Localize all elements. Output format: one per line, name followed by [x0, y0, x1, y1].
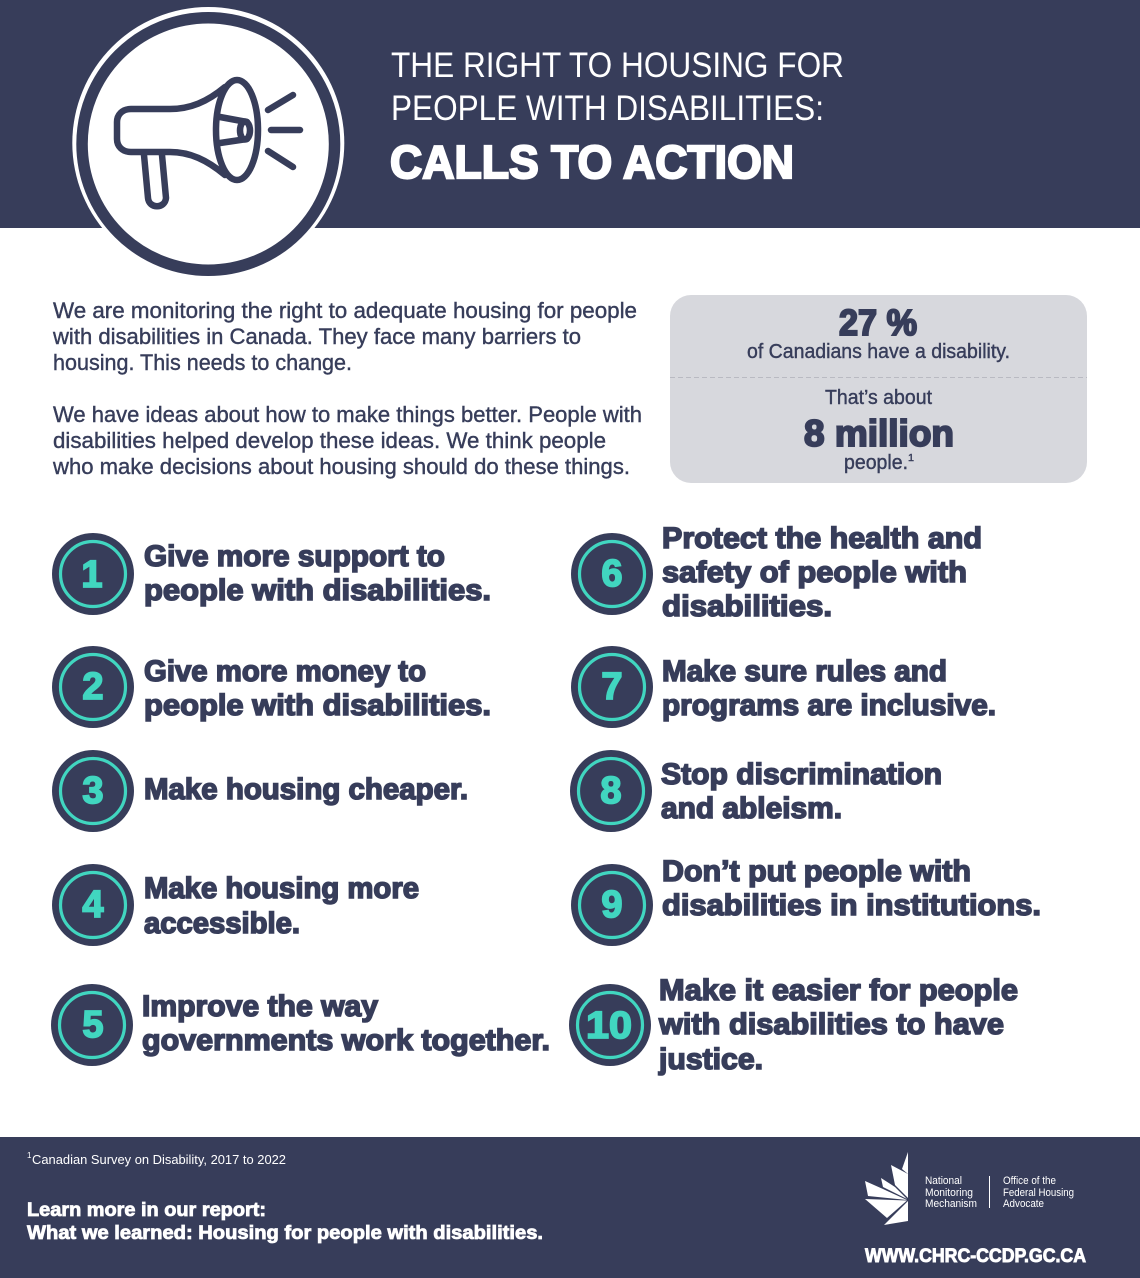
action 8: 8: [600, 770, 622, 812]
report link text: [27, 1200, 543, 1244]
footer band: [0, 1137, 1140, 1278]
action 5: 5: [82, 1004, 104, 1046]
website: WWW.CHRC-CCDP.GC.CA: [865, 1246, 1086, 1267]
intro text: We have ideas about how to make things better. People with: [53, 402, 642, 427]
intro text: We are monitoring the right to adequate housing for people: [53, 298, 637, 323]
footnote: 1: [27, 1151, 32, 1160]
action 1: 1: [81, 554, 103, 596]
stat: 27 percent: of Canadians have a disability.: [747, 341, 1010, 363]
action 1: people with disabilities.: [144, 574, 491, 607]
report link text: Learn more in our report:: [27, 1200, 266, 1221]
action 5: Improve the way: [142, 990, 378, 1023]
action 10: Make it easier for people: [659, 974, 1018, 1007]
action 6: Protect the health and: [662, 522, 982, 555]
action 4: Make housing more: [144, 872, 419, 905]
action 1: [52, 533, 491, 615]
action 6: safety of people with: [662, 556, 967, 589]
action 4: accessible.: [144, 907, 300, 940]
action 2: Give more money to: [144, 655, 426, 688]
action 2: people with disabilities.: [144, 689, 491, 722]
footnote: Canadian Survey on Disability, 2017 to 2022: [32, 1152, 286, 1167]
action 7: Make sure rules and: [662, 655, 947, 688]
action 3: [52, 750, 468, 832]
action 6: disabilities.: [662, 590, 832, 623]
header band: [0, 0, 1140, 228]
icon: megaphone in circle: [72, 7, 344, 279]
logo text: National Monitoring Mechanism: Monitoring: [925, 1187, 973, 1199]
action 10: 10: [586, 1005, 632, 1047]
action 3: Make housing cheaper.: [144, 773, 468, 806]
action 10: with disabilities to have: [658, 1008, 1004, 1041]
title: THE RIGHT TO HOUSING FOR: [391, 46, 844, 85]
action 2: 2: [82, 666, 104, 708]
stat: 27 percent: 27 %: [839, 302, 917, 343]
action 4: 4: [82, 884, 104, 926]
logo text: Office of the Federal Housing Advocate: Federal Housing: [1003, 1187, 1074, 1199]
action 5: [51, 984, 550, 1066]
title: CALLS TO ACTION: [390, 136, 794, 188]
action 8: Stop discrimination: [661, 758, 942, 791]
logo text: Office of the Federal Housing Advocate: Office of the: [1003, 1175, 1056, 1187]
action 9: Don’t put people with: [662, 855, 971, 888]
intro text: disabilities helped develop these ideas. We think people: [53, 428, 606, 453]
action 9: [571, 855, 1041, 946]
action 7: programs are inclusive.: [662, 689, 996, 722]
stat: 8 million: That’s about: [825, 387, 932, 409]
report link text: What we learned: Housing for people with disabilities.: [27, 1223, 543, 1244]
action 1: Give more support to: [144, 540, 445, 573]
stat: 27 percent: [747, 302, 1010, 363]
stat: 8 million: 1: [908, 453, 914, 464]
logo text: National Monitoring Mechanism: National: [925, 1175, 962, 1187]
logo text: Office of the Federal Housing Advocate: Advocate: [1003, 1198, 1044, 1210]
intro text: [52, 298, 642, 479]
action 9: 9: [601, 884, 623, 926]
stat: 8 million: 8 million: [804, 413, 954, 454]
action 9: disabilities in institutions.: [662, 889, 1041, 922]
logo text: Office of the Federal Housing Advocate: [1003, 1175, 1074, 1210]
action 10: [569, 974, 1018, 1076]
action 8: [570, 750, 942, 832]
action 6: 6: [601, 553, 623, 595]
action 5: governments work together.: [142, 1024, 550, 1057]
logo text: National Monitoring Mechanism: [925, 1175, 977, 1210]
action 4: [52, 864, 419, 946]
action 2: [52, 646, 491, 728]
title: [390, 46, 844, 188]
icon: maple leaf logo: [865, 1152, 908, 1225]
intro text: who make decisions about housing should do these things.: [52, 454, 630, 479]
stat: 8 million: [804, 387, 954, 474]
intro text: housing. This needs to change.: [53, 350, 352, 375]
action 8: and ableism.: [661, 792, 842, 825]
action 3: 3: [82, 770, 104, 812]
stat: 8 million: people.: [844, 452, 908, 474]
action 10: justice.: [658, 1043, 763, 1076]
intro text: with disabilities in Canada. They face many barriers to: [52, 324, 581, 349]
panel: statistics: [670, 295, 1087, 483]
action 6: [571, 522, 982, 623]
action 7: [571, 646, 996, 728]
title: PEOPLE WITH DISABILITIES:: [391, 89, 824, 128]
action 7: 7: [601, 666, 623, 708]
logo text: National Monitoring Mechanism: Mechanism: [925, 1198, 977, 1210]
